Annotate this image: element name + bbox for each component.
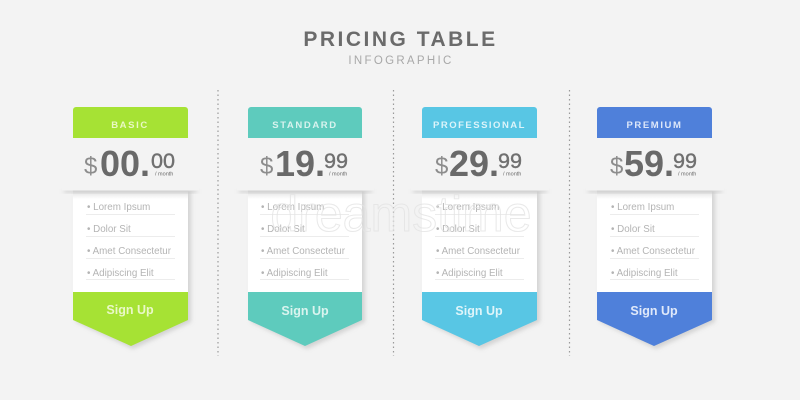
pricing card: premium: PREMIUM xyxy=(626,120,683,131)
price band xyxy=(238,190,373,192)
price xyxy=(84,143,175,184)
card body xyxy=(597,190,712,292)
price band xyxy=(63,190,198,192)
features: • Dolor Sit xyxy=(611,224,655,235)
header: premium xyxy=(597,107,712,138)
price: 99 xyxy=(498,150,522,173)
price: $ xyxy=(260,153,273,180)
price: 59. xyxy=(624,143,674,184)
price: $ xyxy=(435,153,448,180)
pricing card: premium xyxy=(586,107,724,349)
features: • Lorem Ipsum xyxy=(261,202,324,213)
price: / month xyxy=(678,172,696,178)
features xyxy=(86,202,175,280)
header: professional xyxy=(422,107,537,138)
card body xyxy=(422,190,537,292)
price band xyxy=(412,190,548,192)
price: $ xyxy=(610,153,623,180)
features: • Adipiscing Elit xyxy=(436,268,503,279)
features: • Dolor Sit xyxy=(87,224,131,235)
price: / month xyxy=(155,172,173,178)
pricing card: professional: Sign Up xyxy=(455,304,503,318)
card body xyxy=(248,190,362,292)
pricing card: standard: Sign Up xyxy=(281,304,329,318)
subtitle: INFOGRAPHIC xyxy=(348,55,454,67)
features: • Adipiscing Elit xyxy=(611,268,678,279)
sign up button xyxy=(597,292,712,346)
card body xyxy=(73,190,188,292)
features xyxy=(435,202,524,280)
features: • Amet Consectetur xyxy=(611,246,696,257)
features: • Amet Consectetur xyxy=(87,246,172,257)
features xyxy=(260,202,349,280)
title: PRICING TABLE xyxy=(303,28,498,51)
pricing card: basic xyxy=(62,107,199,349)
pricing card: basic: Sign Up xyxy=(106,303,154,317)
price: / month xyxy=(329,172,347,178)
pricing card: standard: STANDARD xyxy=(272,120,338,131)
pricing card: professional xyxy=(411,107,549,349)
features: • Amet Consectetur xyxy=(436,246,521,257)
price: / month xyxy=(503,172,521,178)
header: basic xyxy=(73,107,188,138)
sign up button xyxy=(73,292,188,346)
features: • Dolor Sit xyxy=(436,224,480,235)
watermark: dreamstime xyxy=(270,186,532,242)
sign up button xyxy=(248,292,362,346)
price xyxy=(435,143,522,184)
pricing card: basic: BASIC xyxy=(111,120,149,131)
price xyxy=(610,143,697,184)
price: 99 xyxy=(673,150,697,173)
features: • Adipiscing Elit xyxy=(87,268,154,279)
price: 99 xyxy=(324,150,348,173)
pricing card: standard xyxy=(237,107,374,349)
sign up button xyxy=(422,292,537,346)
price: 00. xyxy=(100,143,150,184)
features: • Adipiscing Elit xyxy=(261,268,328,279)
price xyxy=(260,143,348,184)
features: • Lorem Ipsum xyxy=(611,202,674,213)
header: standard xyxy=(248,107,362,138)
features: • Dolor Sit xyxy=(261,224,305,235)
pricing card: premium: Sign Up xyxy=(630,304,678,318)
price: 00 xyxy=(151,150,175,173)
pricing card: professional: PROFESSIONAL xyxy=(433,120,526,131)
price band xyxy=(587,190,723,192)
price: $ xyxy=(84,153,97,180)
features: • Lorem Ipsum xyxy=(87,202,150,213)
price: 19. xyxy=(275,143,325,184)
features: • Lorem Ipsum xyxy=(436,202,499,213)
features: • Amet Consectetur xyxy=(261,246,346,257)
price: 29. xyxy=(449,143,499,184)
features xyxy=(610,202,699,280)
